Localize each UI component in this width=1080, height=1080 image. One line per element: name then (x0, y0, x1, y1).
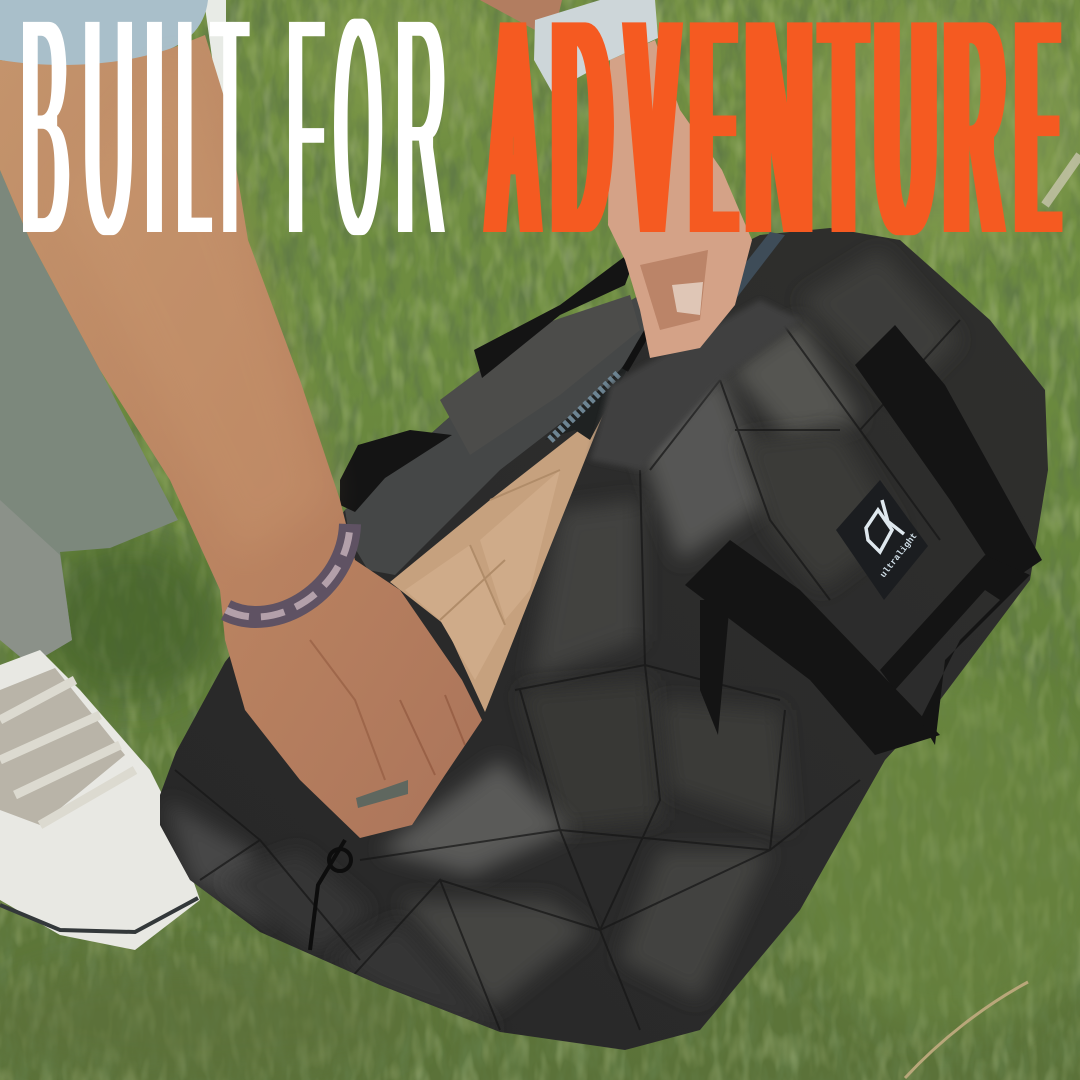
bag straps (340, 245, 1042, 755)
arm with hand and bracelet (0, 35, 482, 838)
label logo (866, 500, 904, 552)
quilt seams (175, 320, 960, 1030)
label wordmark: ultralight (878, 531, 920, 580)
brand label (836, 480, 928, 600)
beige bag lining (390, 410, 605, 712)
title part: BUILT FOR (21, 0, 446, 306)
shirt hem and white cloth (0, 0, 226, 100)
ring (356, 780, 408, 808)
white sneaker (0, 650, 200, 950)
bracelet (226, 524, 350, 617)
title (21, 0, 1058, 311)
shoe laces (0, 680, 135, 825)
bag upper flap (345, 295, 660, 575)
duffel bag (160, 228, 1048, 1050)
title part: ADVENTURE (487, 0, 1058, 311)
front bag panel edge (590, 232, 800, 470)
bag sheen patches (165, 250, 960, 1035)
upper arm with watch and fist (480, 0, 752, 358)
lower zipper pull (310, 840, 351, 950)
grey shorts (0, 170, 178, 665)
